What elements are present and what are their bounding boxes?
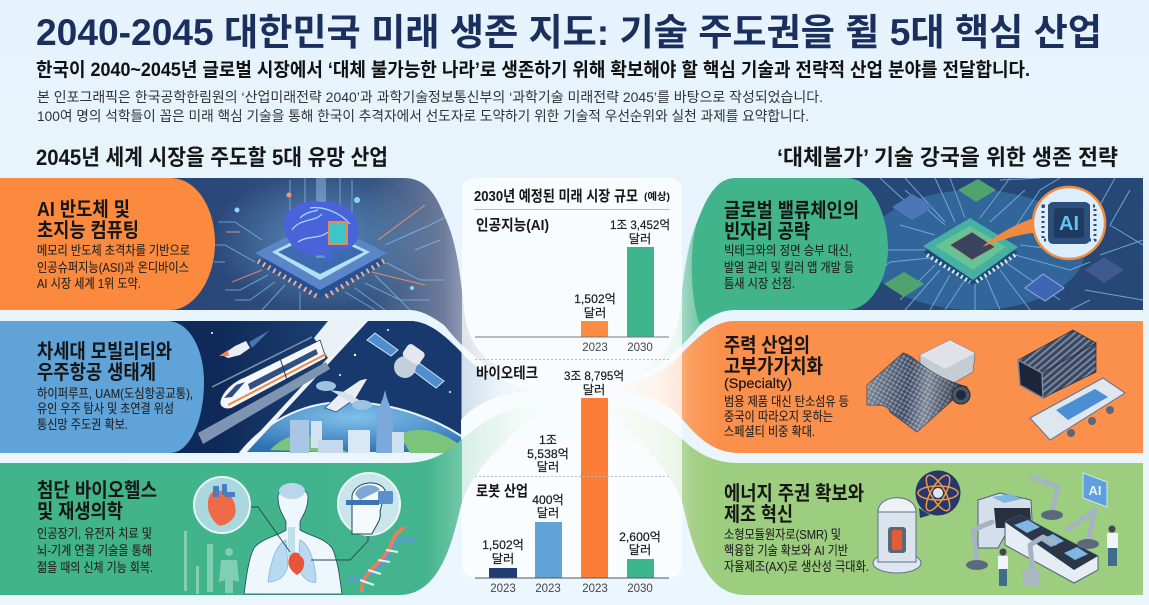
chart: robot industry: 달러 [492, 552, 514, 566]
heading: value chain [724, 199, 859, 243]
body text: mobility: 통신망 주도권 확보. [37, 417, 128, 432]
heading: AI semiconductor: 초지능 컴퓨팅 [37, 219, 139, 242]
chart: biotech: 달러 [583, 383, 605, 397]
heading: energy [724, 482, 864, 526]
panel: market size chart [462, 178, 682, 595]
subtitle: 한국이 2040~2045년 글로벌 시장에서 ‘대체 불가능한 나라’로 생존하기 위해 확보해야 할 핵심 기술과 전략적 산업 분야를 전달합니다. [36, 59, 1030, 81]
icon: AI callout: AI [1059, 213, 1079, 235]
panel: AI semiconductor [0, 170, 524, 378]
chart: robot industry: 로봇 산업 [476, 483, 528, 500]
heading: value chain: 빈자리 공략 [724, 220, 810, 243]
intro text: 본 인포그래픽은 한국공학한림원의 ‘산업미래전략 2040’과 과학기술정보통신부의 ‘과학기술 미래전략 2045’를 바탕으로 작성되었습니다. [37, 89, 823, 105]
body text: value chain: 빅테크와의 정면 승부 대신, [724, 243, 852, 258]
body text: AI semiconductor: 메모리 반도체 초격차를 기반으로 [37, 243, 190, 258]
body text: specialty: 범용 제품 대신 탄소섬유 등 [724, 394, 849, 409]
illustration: brain on chip [212, 170, 450, 310]
body text: biohealth: 뇌-기계 연결 기술을 통해 [37, 543, 152, 558]
chart title: (예상) [644, 190, 670, 203]
icon: atom bubble [916, 470, 960, 518]
body text: value chain [724, 243, 854, 291]
AI card: AI [1088, 483, 1102, 498]
chart: robot industry: 2030 [627, 583, 653, 595]
orange label blob [0, 178, 215, 310]
panel: biohealth [0, 400, 554, 595]
body text: biohealth: 인공장기, 유전자 치료 및 [37, 526, 152, 541]
heading: biohealth: 첨단 바이오헬스 [37, 479, 157, 502]
chart: robot industry: 2023 [535, 583, 561, 595]
chart: robot industry: 2023 [582, 583, 608, 595]
heading: value chain: 글로벌 밸류체인의 [724, 199, 859, 222]
chart: artificial intelligence: 1,502억 [574, 292, 616, 306]
heading: specialty [724, 334, 823, 391]
icon: reactor [873, 498, 921, 573]
heading: specialty: (Specialty) [724, 375, 792, 391]
illustration: train, rocket, satellite, earth [170, 321, 470, 453]
heading: AI semiconductor [37, 198, 139, 242]
heading: mobility: 차세대 모빌리티와 [37, 340, 172, 363]
chart title: 2030년 예정된 미래 시장 규모 [474, 188, 638, 205]
intro text: 100여 명의 석학들이 꼽은 미래 핵심 기술을 통해 한국이 추격자에서 선도자로 도약하기 위한 기술적 우선순위와 실천 과제를 요약합니다. [37, 108, 809, 124]
body text: mobility: 유인 우주 탐사 및 초연결 위성 [37, 401, 174, 416]
body text: energy: 핵융합 기술 확보와 AI 기반 [724, 543, 848, 558]
body text: energy: 소형모듈원자로(SMR) 및 [724, 527, 841, 542]
chart: artificial intelligence: 인공지능(AI) [476, 217, 549, 234]
conveyor machine [978, 493, 1098, 583]
body text: value chain: 발열 관리 및 킬러 앱 개발 등 [724, 260, 854, 275]
heading: energy: 제조 혁신 [724, 503, 793, 526]
blue label blob [0, 321, 204, 453]
body text: specialty: 중국이 따라오지 못하는 [724, 409, 833, 424]
body text: AI semiconductor: AI 시장 세계 1위 도약. [37, 276, 141, 291]
chart: biotech: 1조 [539, 433, 557, 447]
chart: artificial intelligence: 1조 3,452억 [610, 218, 670, 232]
panel: value chain [657, 178, 1143, 364]
chart: robot industry: 달러 [537, 506, 559, 520]
robot arms [973, 477, 1095, 572]
heading: specialty: 고부가가치화 [724, 355, 823, 378]
body text: specialty: 스페셜티 비중 확대. [724, 424, 815, 439]
illustration: reactor and smart factory [873, 470, 1118, 586]
body text: specialty [724, 394, 849, 439]
chart: robot industry: 1,502억 [482, 538, 524, 552]
heading: mobility: 우주항공 생태계 [37, 361, 156, 384]
chart: robot industry [475, 483, 669, 595]
body text: mobility [37, 386, 193, 432]
illustration: circuit chip with AI callout [848, 178, 1143, 310]
body text: biohealth: 젊을 때의 신체 기능 회복. [37, 560, 153, 575]
panel: specialty [600, 321, 1143, 453]
icon: head with headset [338, 473, 400, 535]
body text: AI semiconductor [37, 243, 190, 291]
chart: biotech: 바이오테크 [476, 365, 538, 382]
heading: mobility [37, 340, 172, 384]
eVTOL [316, 378, 372, 412]
panel: energy and manufacturing [590, 400, 1143, 595]
body text: biohealth [37, 526, 153, 575]
left section heading: 2045년 세계 시장을 주도할 5대 유망 산업 [36, 145, 388, 170]
chart: biotech [476, 365, 624, 578]
right section heading: ‘대체불가’ 기술 강국을 위한 생존 전략 [777, 145, 1118, 170]
AI card [1083, 473, 1107, 507]
icon: DNA [347, 527, 416, 592]
illustration: body, heart, brain interface, DNA [184, 473, 416, 594]
chart: artificial intelligence: 달러 [629, 232, 651, 246]
body text: value chain: 틈새 시장 선점. [724, 276, 795, 291]
panel: mobility and aerospace [0, 321, 544, 453]
heading: energy: 에너지 주권 확보와 [724, 482, 864, 505]
body text: energy: 자율제조(AX)로 생산성 극대화. [724, 559, 869, 574]
chart: robot industry: 달러 [629, 543, 651, 557]
chart: biotech: 달러 [537, 460, 559, 474]
body text: mobility: 하이퍼루프, UAM(도심항공교통), [37, 386, 193, 401]
tube [314, 321, 364, 358]
buildings [290, 390, 404, 453]
train [220, 340, 326, 409]
chart: biotech: 5,538억 [527, 447, 569, 461]
body text: AI semiconductor: 인공슈퍼지능(ASI)과 온디바이스 [37, 260, 189, 275]
chart: biotech: 3조 8,795억 [564, 369, 624, 383]
chart: artificial intelligence [475, 217, 670, 354]
small chips [884, 179, 1124, 301]
icon: AI callout [1033, 187, 1105, 259]
chart: robot industry: 2023 [490, 583, 516, 595]
rocket [219, 330, 270, 358]
heading: AI semiconductor: AI 반도체 및 [37, 198, 130, 221]
chart: artificial intelligence: 달러 [584, 306, 606, 320]
body text: energy [724, 527, 869, 574]
heading: biohealth: 및 재생의학 [37, 500, 123, 523]
intro text [37, 89, 823, 124]
satellite [367, 333, 444, 388]
icon: heart circle [194, 477, 250, 533]
chart: robot industry: 400억 [532, 493, 564, 507]
chart: artificial intelligence: 2023 [582, 342, 608, 354]
chart: robot industry: 2,600억 [619, 530, 661, 544]
workers [998, 526, 1118, 586]
heading: biohealth [37, 479, 157, 523]
green label blob [692, 178, 888, 325]
illustration: carbon fibre and metal parts [867, 330, 1125, 440]
chart: artificial intelligence: 2030 [627, 342, 653, 354]
heading: specialty: 주력 산업의 [724, 334, 810, 357]
rails [198, 362, 330, 444]
title: 2040-2045 대한민국 미래 생존 지도: 기술 주도권을 쥘 5대 핵심 산업 [36, 12, 1102, 53]
